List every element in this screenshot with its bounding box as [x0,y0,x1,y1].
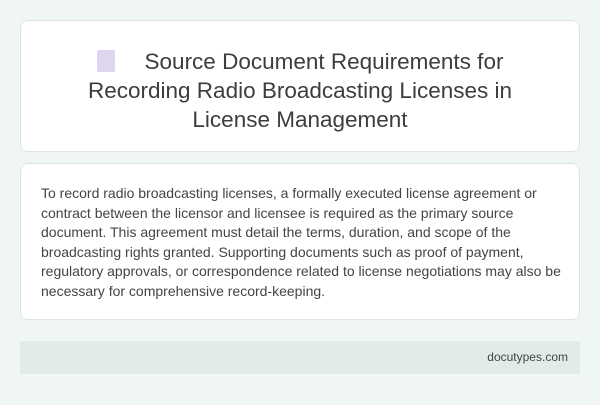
footer text: docutypes.com [487,350,568,364]
panel: description [20,163,580,320]
text block: To record radio broadcasting licenses, a formally executed license agreement or contract between the licensor and licensee is required as the primary source document. This agreement must detail the terms, duration, and scope of the broadcasting rights granted. Supporting documents such as proof of payment, regulatory approvals, or correspondence related to license negotiations may also be necessary for comprehensive record-keeping. [41,185,561,298]
footer bar [20,341,580,374]
title: Source Document Requirements for Recording Radio Broadcasting Licenses in License Management [88,49,512,132]
panel: title card [20,20,580,152]
